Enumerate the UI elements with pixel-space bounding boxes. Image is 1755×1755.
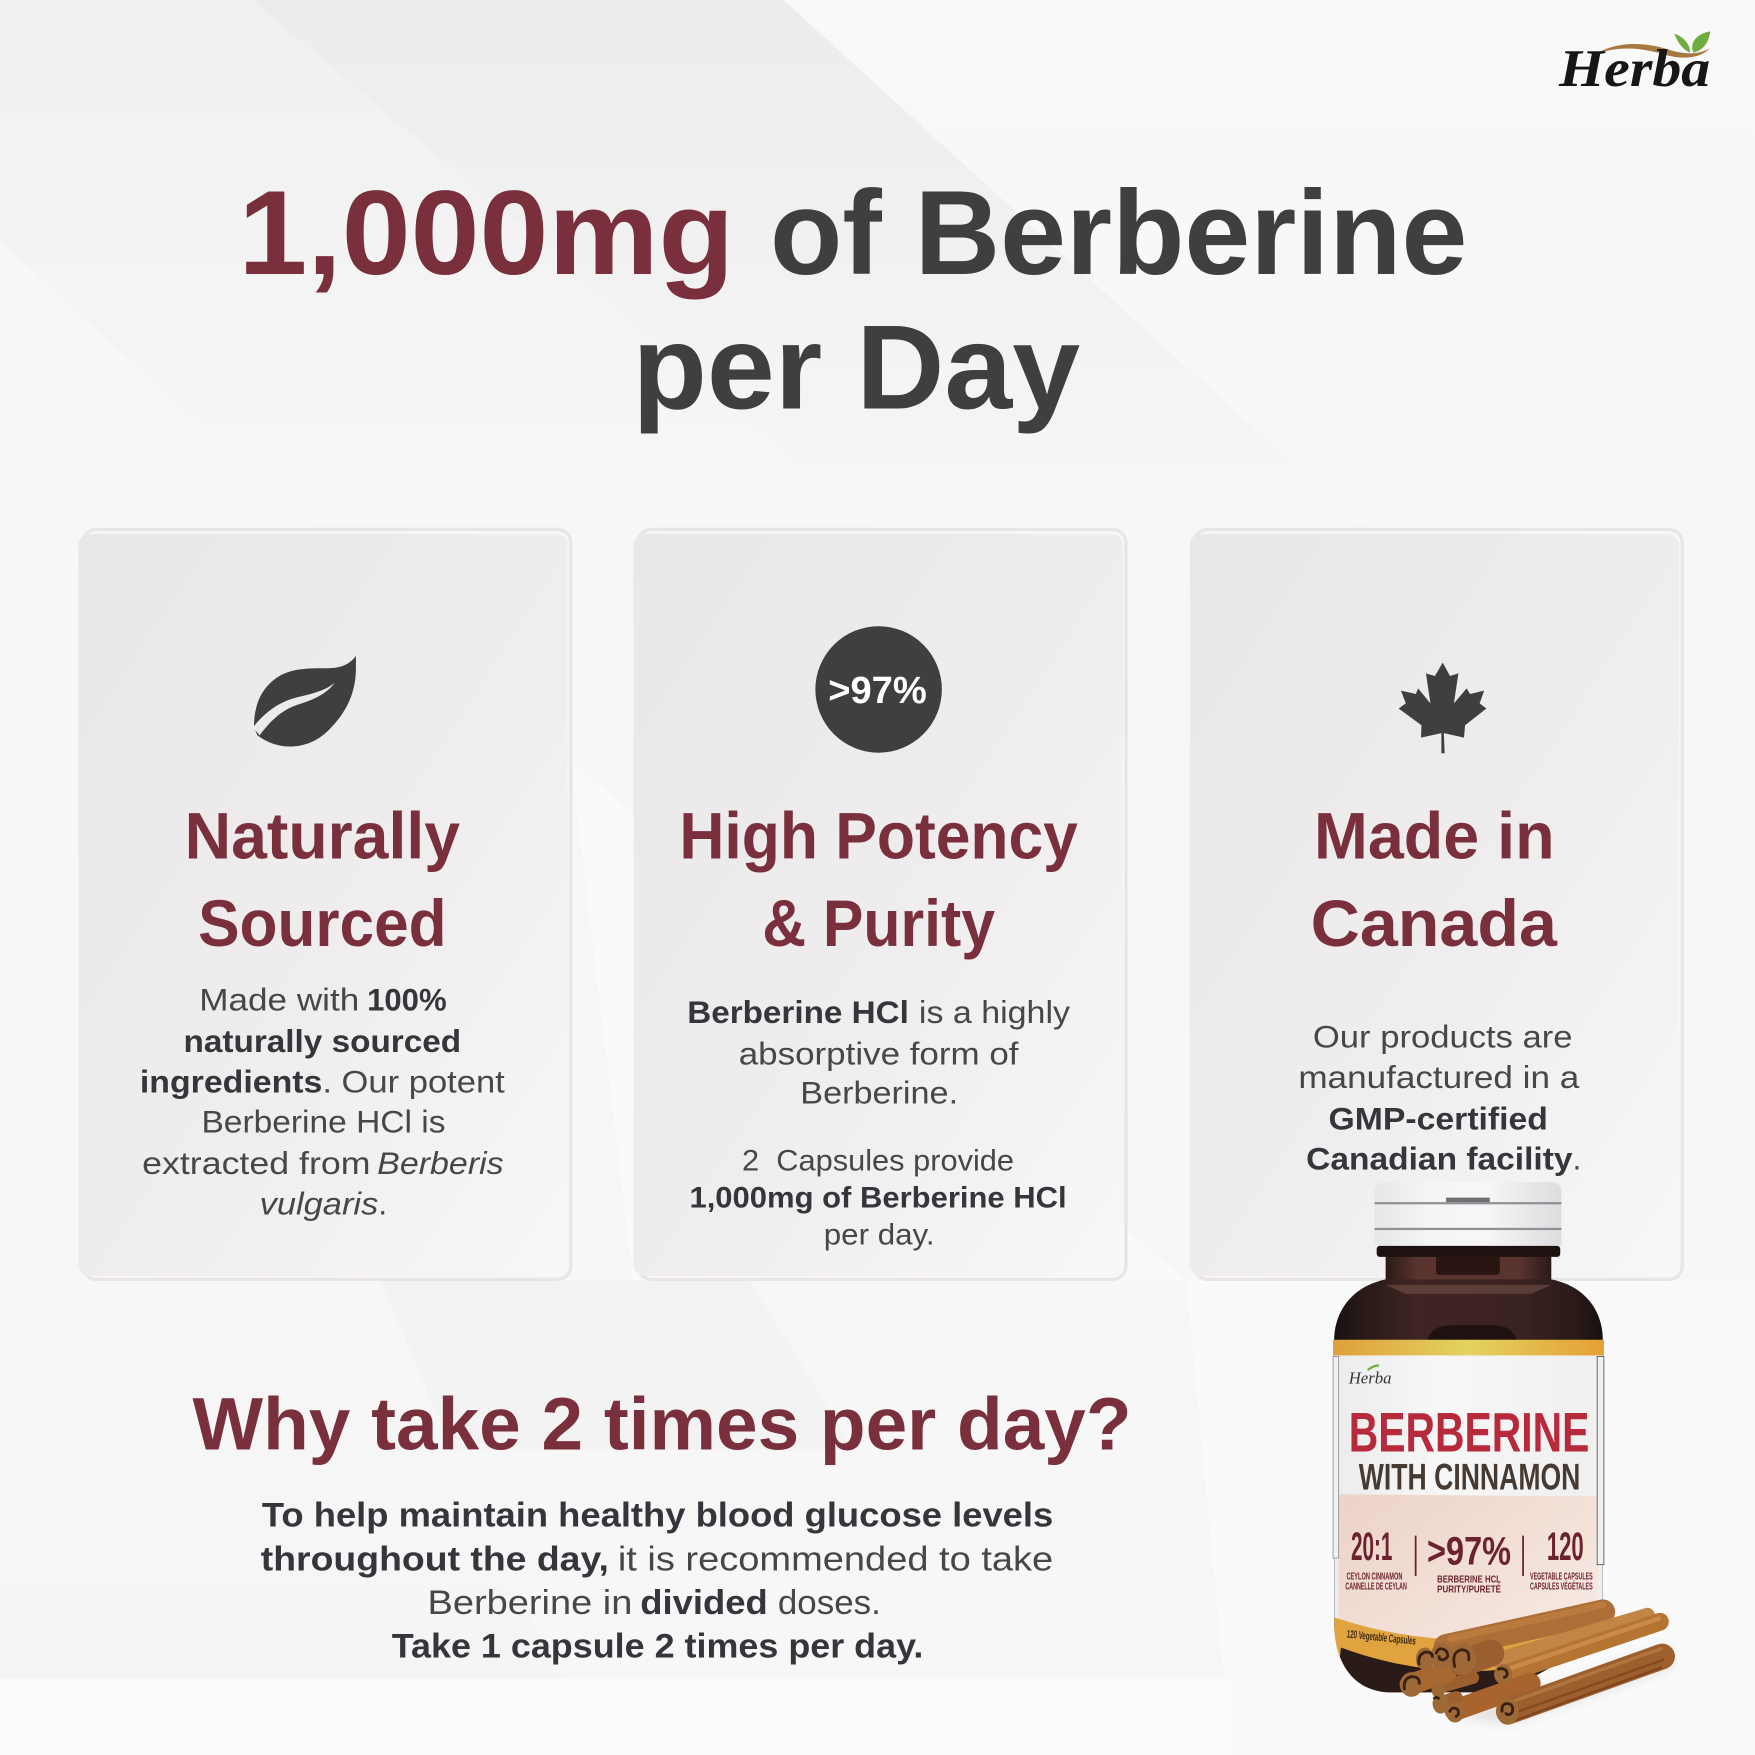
logo: Herba: Herba [1558,40,1710,98]
text block: 1,000mg of Berberine HCl [689,1182,1067,1215]
text block: Our products are [1313,1019,1573,1055]
heading: Made in [1314,798,1555,872]
bottle label: Herba [1348,1368,1392,1387]
text block: why explanation: doses. [778,1584,881,1622]
heading: Canada [1311,886,1558,960]
text block: why explanation: Berberine in [428,1584,632,1622]
text block: manufactured in a [1298,1059,1580,1095]
panel: made in canada [1190,529,1682,1279]
bottle label: 20:1 [1351,1524,1392,1569]
bottle label: VEGETABLE CAPSULES [1530,1571,1593,1582]
panel: high potency [634,529,1126,1279]
text block: Berberis [377,1145,504,1181]
bottle label: 120 [1547,1524,1584,1569]
product bottle with cinnamon [1333,1182,1673,1725]
bottle label: WITH CINNAMON [1359,1457,1580,1498]
text block: naturally sourced [184,1023,461,1059]
heading: High Potency [679,798,1078,872]
bottle glass [1334,1246,1603,1692]
heading: why take 2 times: Why take 2 times per day? [193,1382,1132,1465]
bottle label: CAPSULES VÉGÉTALES [1530,1579,1593,1592]
text block: Berberine HCl is [201,1104,445,1140]
text block: Made with [199,982,359,1018]
text block [140,982,505,1221]
heading [185,798,460,960]
bottle label: >97% [1427,1529,1511,1574]
text block [1298,1019,1581,1177]
heading: Sourced [198,886,447,960]
text block: Berberine HCl [687,994,909,1030]
text block: 2 Capsules provide [742,1145,1014,1178]
text block: extracted from [142,1145,370,1181]
panel: naturally sourced [78,529,571,1279]
heading [1311,798,1558,960]
heading: Naturally [185,798,460,872]
bottle label: BERBERINE HCL [1437,1575,1501,1586]
title: 1,000mg [238,167,734,300]
heading [679,798,1078,960]
text block: why explanation: To help maintain healthy blood glucose levels [262,1497,1053,1535]
text block: . [378,1185,387,1221]
bottle label: CANNELLE DE CEYLAN [1345,1581,1407,1592]
text block: ingredients [140,1063,322,1099]
bottle label: 120 Vegetable Capsules [1346,1629,1416,1648]
text block: why explanation: it is recommended to take [618,1540,1053,1578]
text block: why explanation [261,1497,1053,1666]
text block: why explanation: divided [640,1584,768,1622]
icon: leaf [253,656,356,747]
title: per Day [632,302,1080,435]
text block: GMP-certified [1329,1100,1548,1136]
text block: absorptive form of [739,1035,1019,1071]
text block: . Our potent [322,1063,505,1099]
text block: 100% [367,982,447,1018]
heading: & Purity [762,886,995,960]
text block: per day. [824,1219,935,1252]
title: of Berberine [770,167,1467,300]
text block: is a highly [919,994,1070,1030]
text block: Berberine. [800,1075,958,1111]
text block: why explanation: throughout the day, [261,1540,609,1578]
text block: why explanation: Take 1 capsule 2 times per day. [392,1628,923,1666]
icon: >97% badge: >97% [828,670,927,712]
text block: . [1573,1141,1581,1177]
icon: maple leaf [1399,663,1486,753]
icon: >97% badge [815,626,942,753]
bottle label: CEYLON CINNAMON [1346,1571,1402,1582]
bottle label: PURITY/PURETÉ [1437,1583,1501,1596]
cinnamon sticks [1400,1605,1673,1725]
text block [687,994,1070,1252]
bottle cap [1374,1182,1561,1246]
bottle label: BERBERINE [1349,1401,1589,1464]
text block: vulgaris [260,1185,378,1221]
title [238,167,1467,435]
bottle label [1333,1340,1612,1712]
text block: Canadian facility [1306,1141,1573,1177]
